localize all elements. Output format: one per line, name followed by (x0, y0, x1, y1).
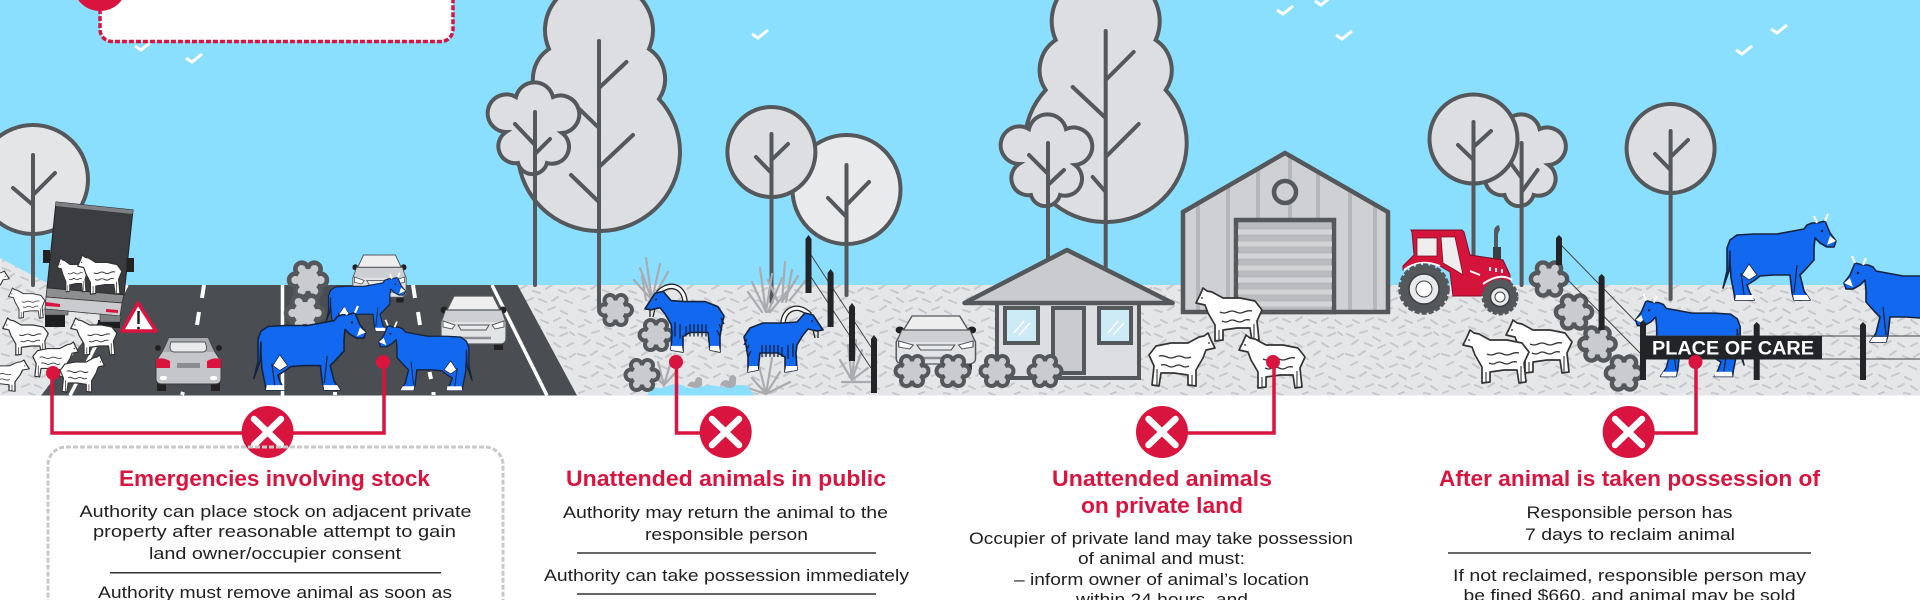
place of care fence and sign (1640, 320, 1920, 380)
bushes (599, 295, 1061, 390)
grass tufts (634, 258, 870, 394)
place of care fence and sign: PLACE OF CARE (1652, 338, 1814, 360)
panel: after animal is taken possession of (1439, 466, 1821, 600)
sheep by house (1149, 288, 1305, 388)
panel: unattended animals on private land: Occupier of private land may take possession (969, 529, 1353, 548)
panel: unattended animals on private land: on private land (1081, 493, 1243, 518)
panel: unattended animals in public: Authority may return the animal to the (563, 503, 888, 522)
panel: emergencies involving stock (48, 447, 503, 600)
tree: left round (0, 125, 88, 285)
warning triangle (122, 303, 156, 331)
road (41, 285, 577, 396)
bushes by right fence (1531, 262, 1642, 390)
panel: emergencies involving stock: property after reasonable attempt to gain (93, 522, 456, 541)
connector: unattended in public (669, 355, 752, 458)
connector: private land (1136, 355, 1280, 458)
panel: emergencies involving stock: Emergencies involving stock (119, 466, 431, 491)
panel: emergencies involving stock: Authority can place stock on adjacent private (80, 502, 472, 521)
tree: round right of barn (1430, 94, 1518, 262)
tree: light round centre-left (792, 135, 900, 295)
barn (1183, 150, 1388, 312)
cows on road (254, 273, 472, 390)
tree: large tree by house (1025, 0, 1187, 267)
sheep by tractor (1463, 320, 1572, 383)
birds (135, 0, 1787, 62)
tree: lobed right of barn (1474, 114, 1566, 285)
panel: unattended animals on private land (969, 466, 1353, 600)
car by house (896, 316, 976, 370)
panel: unattended animals on private land: Unattended animals (1052, 466, 1272, 491)
truck (43, 202, 134, 328)
tractor (1400, 225, 1517, 314)
road median bushes (286, 263, 327, 330)
tree: lobed tree by house (1001, 114, 1092, 258)
panel: unattended animals on private land: of animal and must: (1078, 549, 1245, 568)
connector: emergencies (46, 355, 390, 458)
cows at place of care (1636, 214, 1920, 377)
sheep on roadside (0, 271, 117, 392)
fence diagonal right (1556, 235, 1642, 355)
panel: unattended animals in public: Unattended animals in public (566, 466, 886, 491)
tree: lobed tree by road (488, 82, 579, 285)
tree: round centre-left (727, 107, 815, 302)
panel: unattended animals in public (544, 466, 910, 594)
panel: after animal is taken possession of: 7 days to reclaim animal (1525, 525, 1735, 544)
panel: after animal is taken possession of: If not reclaimed, responsible person may (1453, 566, 1807, 585)
tree: round far right (1627, 104, 1715, 299)
fence left (806, 235, 877, 393)
cars on road (155, 255, 506, 391)
tree: large tree by road (518, 0, 680, 307)
pond with ducks (647, 375, 754, 396)
ground (0, 258, 1920, 396)
goats (645, 286, 823, 372)
panel: unattended animals in public: Authority can take possession immediately (544, 566, 910, 585)
panel: unattended animals on private land: – inform owner of animal’s location (1014, 570, 1309, 589)
connector: after possession (1603, 355, 1702, 458)
house (964, 250, 1173, 378)
callout box at top (73, 0, 453, 42)
panel: unattended animals in public: responsible person (645, 525, 808, 544)
panel: after animal is taken possession of: After animal is taken possession of (1439, 466, 1821, 491)
sheep on truck (57, 255, 122, 294)
panel: emergencies involving stock: land owner/occupier consent (149, 544, 401, 563)
white area below scene (0, 396, 1920, 600)
panel: after animal is taken possession of: Responsible person has (1526, 503, 1732, 522)
sky background (0, 0, 1920, 396)
